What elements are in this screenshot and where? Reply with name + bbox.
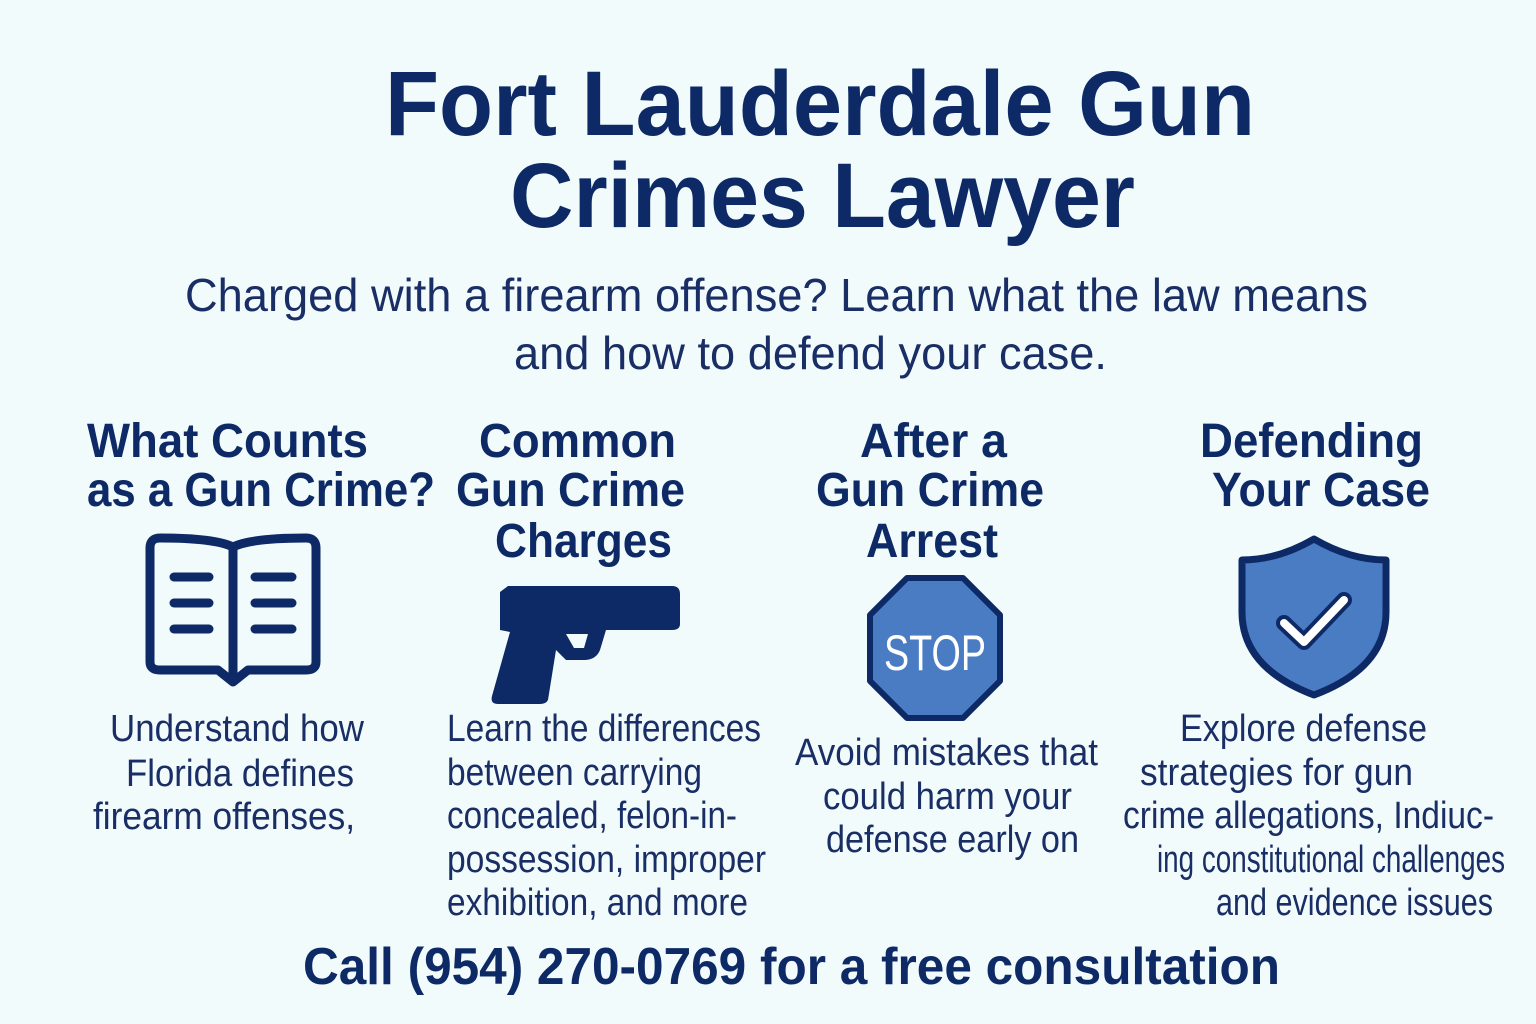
footer call to action: Call (954) 270-0769 for a free consultation [303,938,1280,996]
heading: after arrest: Arrest [866,515,998,568]
title: Crimes Lawyer [510,145,1135,247]
icon: handgun [492,586,680,704]
text: what counts: Understand how [110,708,365,750]
heading: defending: Defending [1200,415,1423,468]
subtitle: and how to defend your case. [514,327,1107,379]
text: after arrest: defense early on [826,819,1079,861]
heading: common charges: Common [479,415,676,468]
title: Fort Lauderdale Gun [385,53,1255,155]
icon: stop sign [870,578,1000,718]
text: defending: Explore defense [1180,708,1427,750]
heading: what counts: as a Gun Crime? [87,464,435,517]
heading: what counts [87,415,435,517]
text: common charges: concealed, felon-in- [447,795,737,837]
heading: after arrest: Gun Crime [816,464,1044,517]
subtitle [185,269,1368,379]
text: common charges: possession, improper [447,839,766,881]
icon: book [150,538,316,682]
heading: after arrest [816,415,1044,568]
heading: what counts: What Counts [87,415,368,468]
panel: defending [1123,415,1505,924]
text: common charges: Learn the differences [447,708,761,750]
title [385,53,1255,247]
panel: what counts [87,415,435,838]
text: defending: strategies for gun [1140,752,1413,794]
text: after arrest: Avoid mistakes that [795,732,1098,774]
icon: stop sign: STOP [884,625,986,681]
text: after arrest [795,732,1098,861]
heading: defending [1200,415,1430,517]
text: common charges: exhibition, and more [447,882,748,924]
heading: defending: Your Case [1212,464,1430,517]
heading: common charges: Gun Crime [456,464,685,517]
text: after arrest: could harm your [823,776,1072,818]
heading: common charges [456,415,685,568]
text: what counts [93,708,365,838]
text: defending: crime allegations, Indiuc- [1123,795,1494,837]
text: what counts: Florida defines [126,753,354,795]
heading: common charges: Charges [495,515,672,568]
text: common charges: between carrying [447,752,702,794]
heading: after arrest: After a [860,415,1007,468]
text: defending [1123,708,1505,924]
text: common charges [447,708,766,924]
panel: after arrest [795,415,1098,861]
text: what counts: firearm offenses, [93,796,355,838]
icon: shield [1242,539,1386,695]
panel: common charges [447,415,766,924]
subtitle: Charged with a firearm offense? Learn what the law means [185,269,1368,321]
